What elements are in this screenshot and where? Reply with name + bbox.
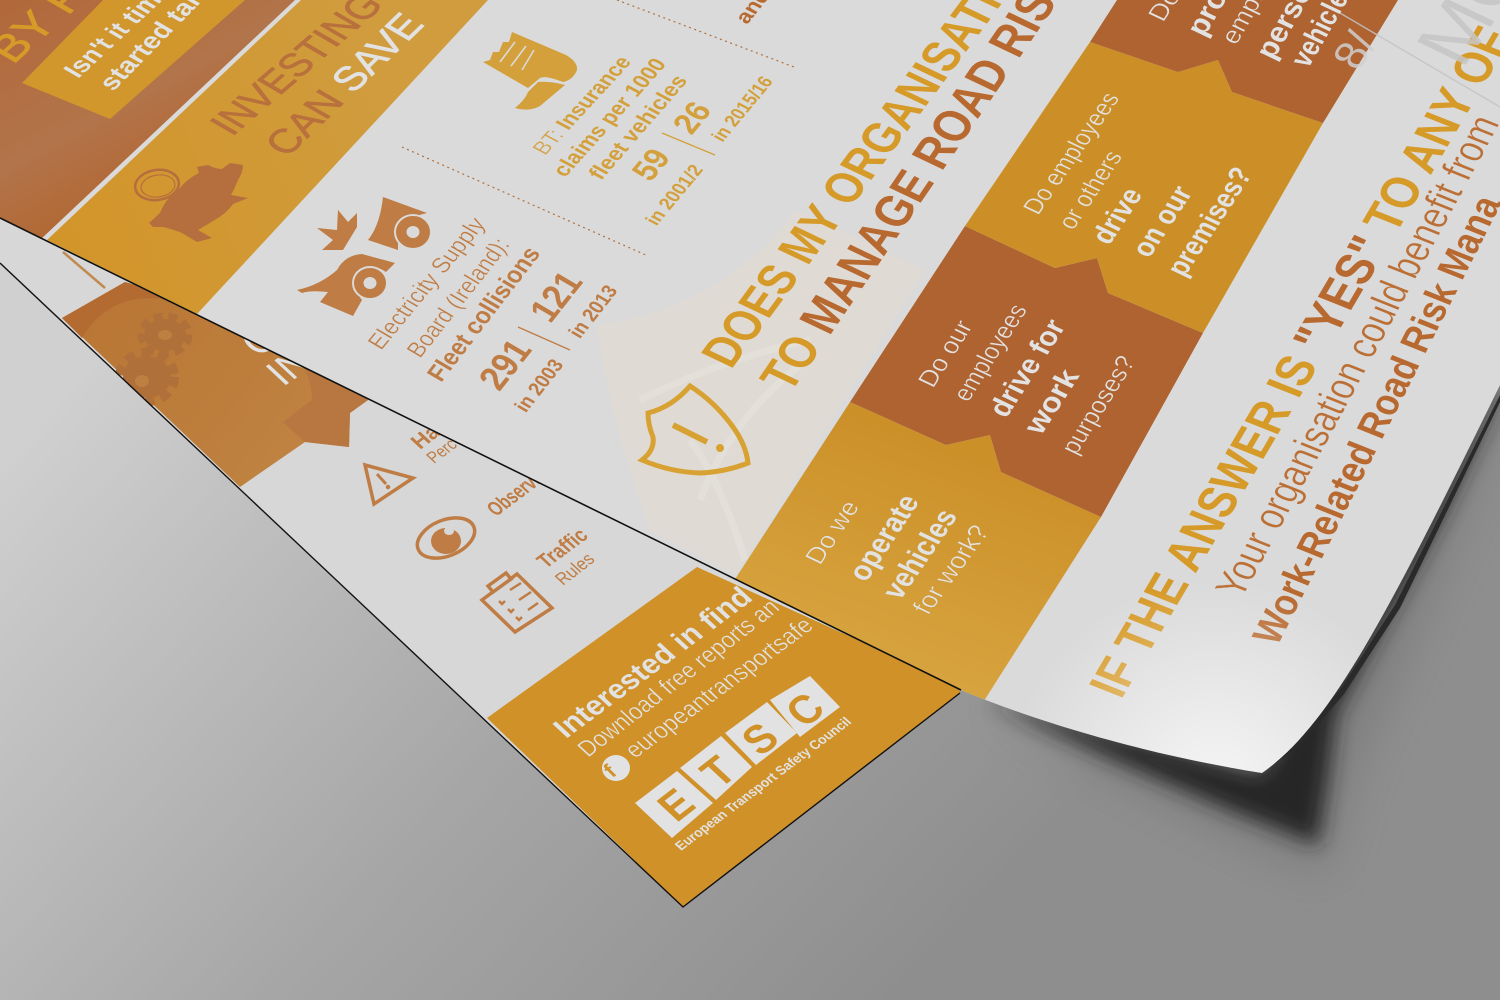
stat: BT insurance claims: claims per 1000 [547,54,671,180]
list: hazard perception: Perception [422,411,493,467]
header text fragments: C [231,316,289,364]
box: operate vehicles: for work? [906,521,995,619]
logo: ETSC: European Transport Safety Council [671,714,854,853]
stat label: BT: Insurance [527,52,636,158]
logo: ETSC: S [731,714,788,764]
panel: dark header region [0,0,295,240]
list: traffic rules: Traffic [531,523,593,572]
box: operate vehicles [728,402,1101,715]
icon: clipboard checklist [482,573,552,632]
stat: electricity supply board: Fleet collisions [422,242,546,386]
heading: can save: CAN SAVE [255,6,433,163]
box: drive for work: drive for [983,314,1073,422]
top sheet lower edge [0,218,961,690]
logo: ETSC: E [647,780,704,830]
list: hazard perception: Hazard [405,394,480,453]
stat: electricity supply board: 121 [521,265,591,328]
overlay: grey sketch marks: 8/ [1323,24,1388,76]
lower sheet edges [0,263,960,907]
callout box [22,0,245,119]
box: drive on premises: drive [1086,183,1149,249]
box: drive on premises [965,42,1323,333]
box: drive for work: purposes? [1054,351,1141,459]
box: drive for work: employees [946,299,1033,406]
stat: electricity supply board: in 2003 [510,356,568,416]
icon: warning shield [642,386,748,473]
paper curl shadow [985,380,1500,875]
faint background emblem [639,337,810,560]
list: hazard perception [410,429,460,464]
stat values: 59 [624,143,679,186]
stat: electricity supply board: Board (Ireland): [402,234,516,362]
footer website: europeantransportsafe [619,612,819,763]
list: traffic rules [535,530,594,586]
stat: BT insurance claims: 26 [665,96,720,139]
panel: lower sheet orange header [62,282,368,487]
overlay: grey sketch marks [1323,0,1500,107]
box: operate vehicles: vehicles [875,504,964,604]
list: traffic rules: Rules [551,550,599,589]
stat: electricity supply board [297,197,622,416]
icon: facebook: f [598,760,622,782]
icon: gears [119,316,189,402]
logo: ETSC [635,676,854,853]
stat: electricity supply board: in 2013 [564,282,622,342]
icon: piggy bank [133,163,248,242]
panel: footer band [487,567,990,907]
footer download line: Download free reports an [572,594,785,762]
box: drive for work: work [1017,364,1086,440]
logo: ETSC: C [776,684,834,735]
box: personal vehicles [1090,0,1398,123]
box: drive for work: Do our [911,315,979,392]
dotted dividers [402,0,794,256]
header text fragments [244,338,304,385]
box: drive on premises: premises? [1161,162,1259,281]
box: operate vehicles: Do we [798,496,865,569]
icon: warning triangle [365,465,413,504]
icon: eye [416,516,476,560]
stat label: Electricity Supply [363,213,492,354]
stat: BT insurance claims: in 2015/16 [708,73,778,145]
footer heading: Interested in find [547,581,759,744]
stat: BT insurance claims: in 2001/2 [641,161,708,229]
box: drive on premises: Do employees [1018,88,1126,219]
panel: lower sheet [62,251,960,906]
icon: scroll [483,32,577,110]
box: operate vehicles: operate [841,489,926,586]
stat: BT insurance claims: fleet vehicles [583,71,693,183]
stat values: 291 [470,333,540,396]
icon: facebook [602,755,630,781]
panel: investing band [47,0,488,314]
stat: BT insurance claims [483,32,778,229]
panel: question boxes [728,0,1398,715]
corner highlight [950,540,1500,800]
logo: ETSC: T [690,747,746,796]
box: drive on premises: or others [1051,146,1128,234]
list: observation: Observation [481,449,572,520]
box: drive on premises: on our [1126,181,1199,262]
box: drive for work [850,226,1203,517]
icon: colliding trucks [297,197,431,316]
header text fragments: IN [257,341,322,393]
